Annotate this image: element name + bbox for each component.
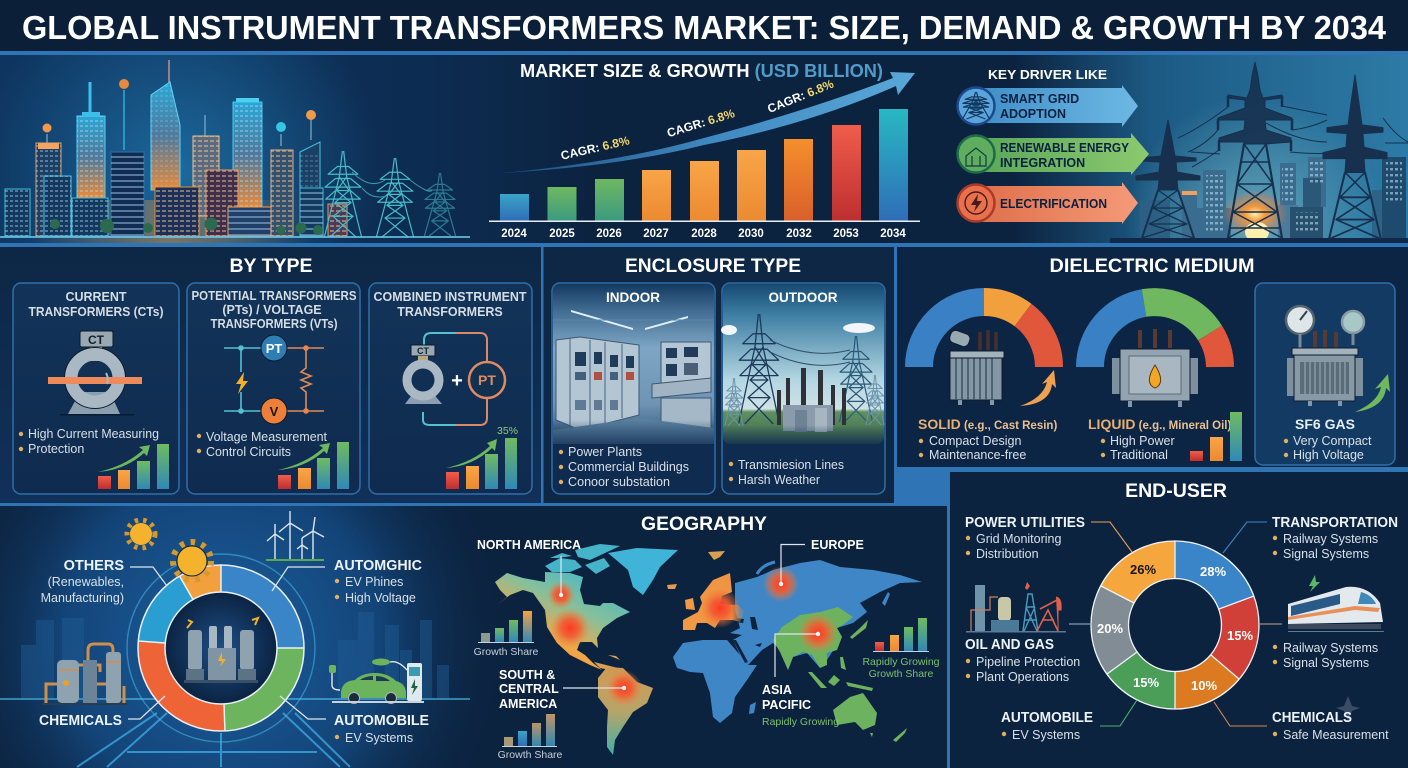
- divider between by type and enclosure: [541, 247, 544, 503]
- label: others: (Renewables,: [48, 575, 124, 589]
- year labels: 2053: [833, 228, 859, 240]
- year labels: 2034: [880, 228, 906, 240]
- bullets: Transmiesion Lines: [738, 458, 844, 472]
- label: transportation: TRANSPORTATION: [1272, 515, 1398, 531]
- label: chemicals: CHEMICALS: [39, 713, 122, 729]
- label: power utilities: Distribution: [976, 547, 1039, 561]
- heading: dielectric medium: DIELECTRIC MEDIUM: [1050, 255, 1254, 277]
- CAGR label 3: CAGR: 6.8%: [765, 77, 836, 116]
- callout: asia pacific: Rapidly Growing: [762, 716, 839, 728]
- label: power utilities: Grid Monitoring: [976, 532, 1061, 546]
- divider right of enclosure: [894, 247, 897, 505]
- icon: CT plus PT loop: PT: [478, 372, 496, 388]
- panel: enclosure type: [544, 247, 894, 503]
- card: indoor: [552, 283, 715, 494]
- driver: smart grid adoption: ADOPTION: [1000, 107, 1066, 121]
- label: SOLID (e.g., Cast Resin): [918, 416, 1057, 432]
- bullets: High Current Measuring: [28, 427, 159, 441]
- icon: circuit diagram: PT: [266, 341, 282, 356]
- China and India: [773, 607, 853, 670]
- illustration: substation and pylons: [721, 314, 884, 455]
- card: potential transformers: [187, 283, 360, 494]
- label: automobile: AUTOMOBILE: [1001, 710, 1093, 726]
- callout: south and central america: CENTRAL: [499, 682, 559, 696]
- mini bar chart: [278, 442, 349, 489]
- driver: renewable energy integration: [958, 133, 1149, 175]
- key driver heading: KEY DRIVER LIKE: [988, 67, 1107, 82]
- year labels: 2026: [596, 228, 622, 240]
- card: current transformers: CURRENT: [65, 290, 127, 304]
- panel: geography: [474, 513, 940, 761]
- connector: transportation train: [1260, 623, 1282, 625]
- chart: asia pacific growth share: Growth Share: [869, 668, 934, 680]
- mini bar chart: [1190, 412, 1242, 461]
- illustration: faint background skyline: [21, 612, 449, 698]
- card: current transformers: TRANSFORMERS (CTs): [28, 305, 164, 319]
- bullets: Traditional: [1110, 448, 1168, 462]
- bullets: Maintenance-free: [929, 448, 1026, 462]
- icon: sf6 transformer: [1286, 306, 1364, 406]
- key drivers: [958, 67, 1149, 224]
- mini bar chart: [98, 444, 169, 489]
- card: combined instrument transformers: TRANSFORMERS: [397, 305, 503, 319]
- donut chart: end-user share: 15%: [1133, 675, 1159, 690]
- illustration: city skyline with pylons: [0, 55, 470, 243]
- year labels: 2028: [691, 228, 717, 240]
- year labels: 2032: [786, 228, 812, 240]
- label: oil and gas: Plant Operations: [976, 670, 1069, 684]
- label: automobile: EV Systems: [345, 731, 413, 745]
- item: solid: [918, 302, 1057, 462]
- mini bar chart: [446, 438, 517, 489]
- label: automobile: [1001, 700, 1137, 742]
- bullets: Voltage Measurement: [206, 430, 328, 444]
- label: others: Manufacturing): [41, 591, 124, 605]
- callout: europe: EUROPE: [811, 538, 864, 552]
- label: oil and gas: OIL AND GAS: [965, 637, 1054, 653]
- donut: industries: [126, 553, 316, 743]
- arrow: [1020, 370, 1056, 406]
- label: transportation: Railway Systems: [1283, 532, 1378, 546]
- Africa: [673, 640, 757, 723]
- illustration: switchgear room: [553, 310, 714, 460]
- label: transportation: [1223, 515, 1398, 561]
- frame lines and blue patch: [0, 467, 1408, 506]
- label: automobile: AUTOMOBILE: [334, 713, 429, 729]
- bullets: Power Plants: [568, 445, 642, 459]
- label: power utilities: [965, 515, 1132, 561]
- label: oil and gas: Pipeline Protection: [976, 655, 1080, 669]
- callout: south and central america: SOUTH &: [499, 668, 555, 682]
- chart: market size and growth: [489, 61, 920, 240]
- bars: [489, 109, 920, 222]
- Southeast Asia and Oceania: [808, 620, 907, 742]
- driver: smart grid adoption: [958, 85, 1138, 127]
- callout: south and central america: AMERICA: [499, 697, 557, 711]
- label: automobile: [280, 696, 429, 745]
- percent label: 35%: [497, 425, 518, 437]
- icon: circuit diagram: V: [270, 404, 279, 419]
- label: automotive: [272, 558, 423, 605]
- driver: smart grid adoption: SMART GRID: [1000, 92, 1079, 106]
- label: automotive: AUTOMGHIC: [334, 558, 423, 574]
- bullets: [197, 430, 328, 459]
- connector: oil and gas: [1069, 623, 1092, 625]
- callout: europe: [779, 538, 864, 586]
- label: train systems: Railway Systems: [1283, 641, 1378, 655]
- callout: north america: NORTH AMERICA: [477, 538, 581, 552]
- hero panel: [0, 55, 1408, 247]
- card: outdoor: OUTDOOR: [768, 290, 838, 305]
- illustration: pylons and city at right: [1110, 62, 1408, 243]
- year labels: 2024: [501, 228, 527, 240]
- donut chart: end-user share: 26%: [1130, 562, 1156, 577]
- icon: current transformer: CT: [88, 333, 105, 347]
- label: others: OTHERS: [64, 558, 124, 574]
- card: sf6 gas: [1255, 283, 1395, 465]
- label: train systems: [1273, 641, 1378, 670]
- Americas: [495, 572, 630, 670]
- bullets: [19, 427, 159, 456]
- chart: asia pacific growth share: Rapidly Growing: [862, 656, 940, 668]
- header band: [0, 0, 1408, 55]
- bullets: Very Compact: [1293, 434, 1372, 448]
- CAGR label 1: CAGR: 6.8%: [559, 133, 631, 163]
- year labels: 2027: [643, 228, 669, 240]
- CAGR label 2: CAGR: 6.8%: [665, 106, 737, 140]
- card: potential transformers: POTENTIAL TRANSFORMERS: [192, 289, 356, 303]
- heading: by type: BY TYPE: [229, 255, 313, 277]
- icon: car and charger: [329, 658, 424, 704]
- label: transportation: Signal Systems: [1283, 547, 1369, 561]
- icon: oil and gas plant: [966, 582, 1066, 632]
- item: liquid: [1088, 302, 1242, 462]
- callout: asia pacific: [762, 632, 839, 728]
- label: chemicals: CHEMICALS: [1272, 710, 1352, 726]
- callout: north america: [477, 538, 581, 597]
- arrow: [1355, 374, 1390, 412]
- title: GLOBAL INSTRUMENT TRANSFORMERS MARKET: SIZE, DEMAND & GROWTH BY 2034: [22, 9, 1387, 46]
- driver: electrification: ELECTRIFICATION: [1000, 197, 1107, 211]
- chart: south america growth share: [498, 714, 563, 761]
- Eurasia: [730, 560, 922, 670]
- bullets: Protection: [28, 442, 84, 456]
- donut chart: end-user share: 20%: [1097, 621, 1123, 636]
- chart heading: MARKET SIZE & GROWTH (USD BILLION): [520, 61, 883, 81]
- chart: south america growth share: Growth Share: [498, 749, 563, 761]
- icon: oil transformer: [1112, 329, 1198, 407]
- icon: suns: [127, 520, 211, 580]
- bullets: Harsh Weather: [738, 473, 820, 487]
- label: train systems: Signal Systems: [1283, 656, 1369, 670]
- label: automobile: EV Systems: [1012, 728, 1080, 742]
- card: outdoor: [721, 283, 885, 494]
- label: automotive: High Voltage: [345, 591, 416, 605]
- callout: south and central america: [499, 668, 626, 711]
- icon: CT plus PT loop: CT: [417, 346, 429, 356]
- icon: circuit diagram: [224, 335, 324, 424]
- bullets: [1284, 434, 1372, 462]
- label: automotive: EV Phines: [345, 575, 403, 589]
- label: power utilities: POWER UTILITIES: [965, 515, 1085, 531]
- bullets: [729, 458, 844, 487]
- chart: north america growth share: [474, 611, 539, 658]
- icon: chemical plant: [42, 644, 127, 705]
- gauge: solid: [919, 302, 1049, 367]
- panel: by type: [0, 247, 541, 503]
- donut chart: end-user share: [1083, 533, 1267, 717]
- illustration: perspective floor lines: [77, 713, 350, 767]
- chart: north america growth share: Growth Share: [474, 646, 539, 658]
- label: oil and gas: [965, 637, 1080, 684]
- bullets: High Voltage: [1293, 448, 1364, 462]
- panel: end-user: [950, 472, 1408, 768]
- donut chart: end-user share: 10%: [1191, 678, 1217, 693]
- icon: cast resin transformer: [948, 329, 1004, 405]
- driver: electrification: [958, 182, 1138, 224]
- bullets: High Power: [1110, 434, 1175, 448]
- card: potential transformers: TRANSFORMERS (VTs): [210, 317, 338, 331]
- icon: CT plus PT loop: [405, 333, 505, 425]
- card: combined instrument transformers: COMBINED INSTRUMENT: [374, 290, 527, 304]
- bullets: Compact Design: [929, 434, 1021, 448]
- bullets: Conoor substation: [568, 475, 670, 489]
- callout: asia pacific: PACIFIC: [762, 698, 811, 712]
- icon: CT plus PT loop: +: [451, 370, 463, 392]
- icon: substation: [184, 618, 258, 683]
- card: combined instrument transformers: [369, 283, 532, 494]
- label: chemicals: [1214, 696, 1389, 742]
- chart: asia pacific growth share: [862, 618, 940, 680]
- driver: renewable energy integration: INTEGRATION: [1000, 156, 1085, 170]
- label: others: [41, 558, 167, 605]
- icon: wind turbines: [266, 511, 324, 560]
- driver: renewable energy integration: RENEWABLE ENERGY: [1000, 141, 1130, 155]
- bullets: Commercial Buildings: [568, 460, 689, 474]
- callout: asia pacific: ASIA: [762, 683, 792, 697]
- world map: [495, 544, 922, 755]
- label: chemicals: [39, 696, 165, 729]
- label: LIQUID (e.g., Mineral Oil): [1088, 416, 1231, 432]
- bullets: [919, 434, 1026, 462]
- card: current transformers: [13, 283, 179, 494]
- card: potential transformers: (PTs) / VOLTAGE: [222, 303, 322, 317]
- card: indoor: INDOOR: [606, 290, 660, 305]
- year labels: 2025: [549, 228, 575, 240]
- year labels: 2030: [738, 228, 764, 240]
- gauge: liquid: [1090, 302, 1220, 367]
- bullets: [1101, 434, 1175, 462]
- icon: train: [1288, 575, 1384, 632]
- card: sf6 gas: SF6 GAS: [1295, 416, 1355, 432]
- donut chart: end-user share: 15%: [1227, 628, 1253, 643]
- panel: industries ring: [0, 506, 947, 768]
- bullets: Control Circuits: [206, 445, 291, 459]
- heading: geography: GEOGRAPHY: [641, 513, 767, 535]
- label: chemicals: Safe Measurement: [1283, 728, 1389, 742]
- panel: dielectric medium: [897, 247, 1408, 467]
- heading: enclosure type: ENCLOSURE TYPE: [625, 255, 801, 277]
- heading: end-user: END-USER: [1125, 480, 1227, 502]
- divider left of end-user: [947, 505, 950, 768]
- donut chart: end-user share: 28%: [1200, 564, 1226, 579]
- Europe: [683, 573, 745, 630]
- trend arrow: [503, 72, 915, 173]
- year labels: [501, 228, 906, 240]
- icon: current transformer: [48, 331, 142, 416]
- bullets: [559, 445, 689, 489]
